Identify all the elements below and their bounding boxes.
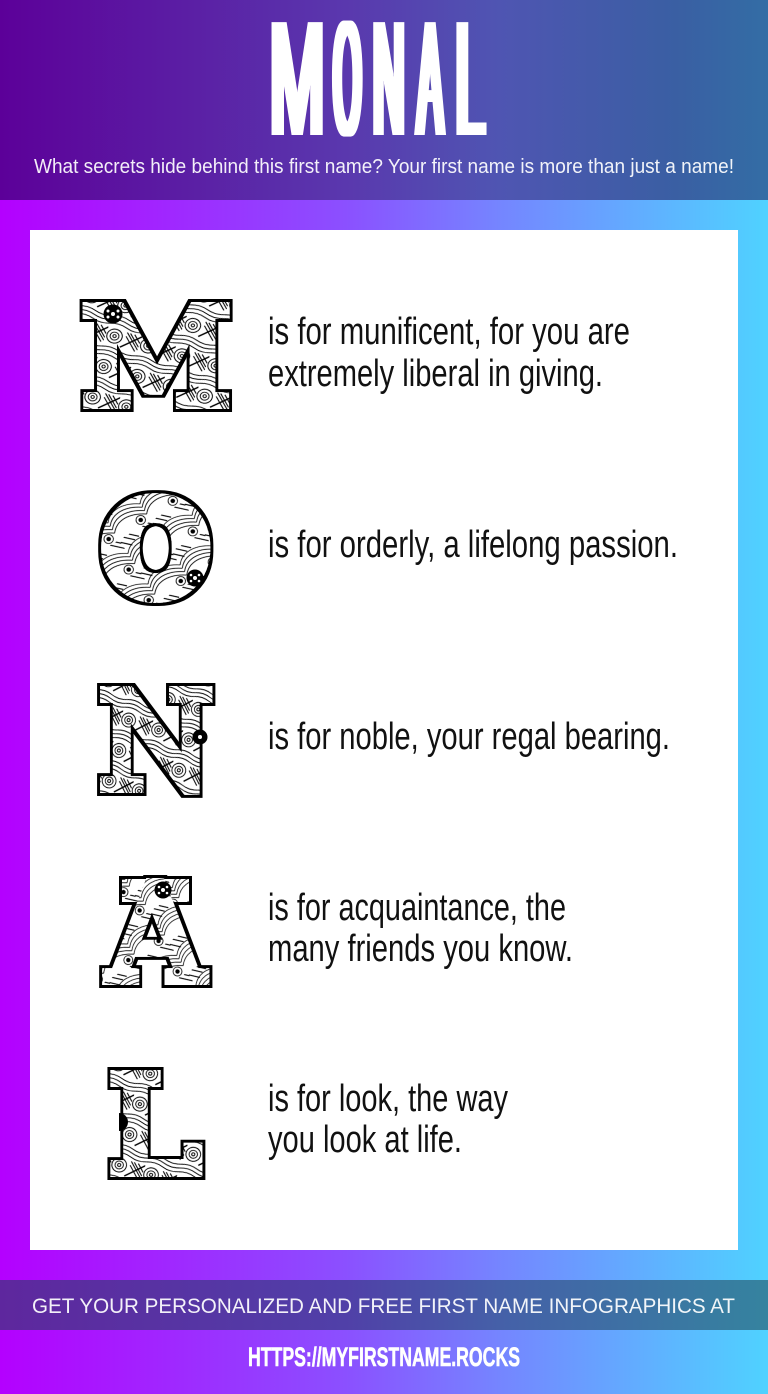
icon: zentangle letter L: L [108,1050,200,1204]
footer call to action: GET YOUR PERSONALIZED AND FREE FIRST NAME INFOGRAPHICS AT [32,1294,735,1318]
icon: zentangle letter A: A [107,858,205,1012]
text: L line [268,1078,508,1161]
text: M line: is for munificent, for you are [268,311,630,353]
title [270,0,485,171]
footer url: HTTPS://MYFIRSTNAME.ROCKS [248,1342,520,1372]
panel: white content card [30,230,738,1250]
row: letter O [107,485,678,617]
text: L line: is for look, the way [268,1078,508,1120]
icon: zentangle letter M: M [81,282,232,436]
icon: zentangle letter O: O [107,485,204,617]
text: A line [268,887,573,970]
row: letter A [107,858,573,1012]
header band [0,0,768,200]
text: L line: you look at life. [268,1119,462,1161]
row: letter L [108,1050,508,1204]
icon: zentangle letter N: N [99,665,213,820]
text: A line: many friends you know. [268,928,573,970]
row: letter N [99,665,670,820]
text: M line: extremely liberal in giving. [268,353,603,395]
text: A line: is for acquaintance, the [268,887,566,929]
footer banner [0,1280,768,1330]
text: M line [268,311,630,395]
subtitle: What secrets hide behind this first name? Your first name is more than just a name! [34,156,734,178]
row: letter M [81,282,630,436]
